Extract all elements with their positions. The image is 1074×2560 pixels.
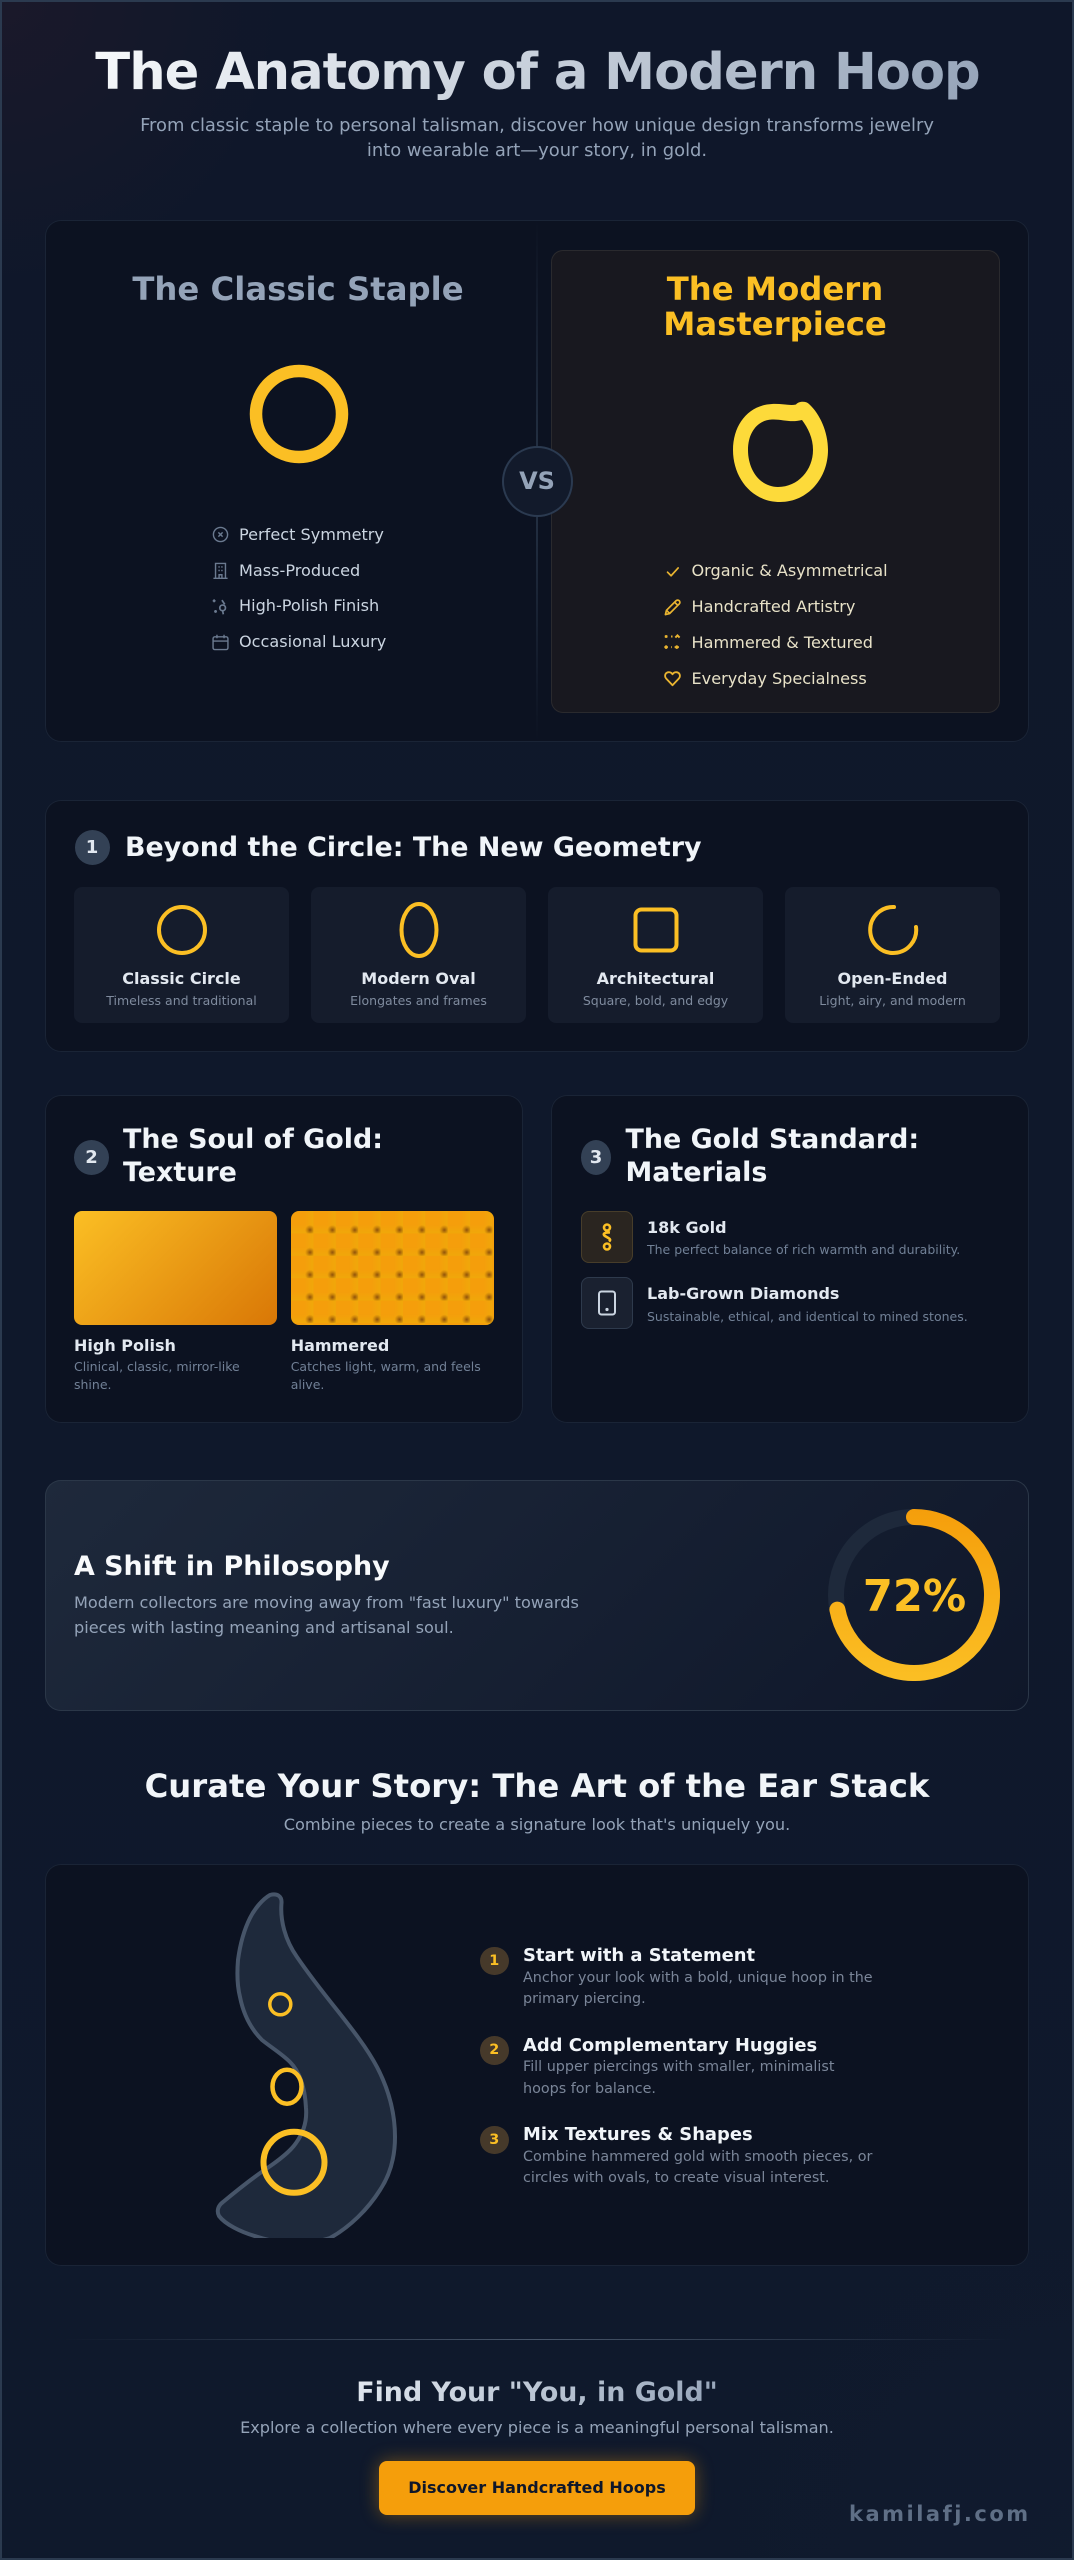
chart: 72 percent gauge: 72% — [862, 1572, 966, 1622]
description: hammered — [291, 1359, 481, 1392]
icon: 18k gold chain — [581, 1211, 633, 1263]
text: lab-grown diamonds: Lab-Grown Diamonds — [647, 1284, 839, 1303]
badge: 2 — [74, 1140, 109, 1174]
step 3 — [480, 2124, 872, 2186]
card: architectural: Square, bold, and edgy — [583, 992, 728, 1008]
subtitle: curate your story: Combine pieces to create a signature look that's uniquely you. — [284, 1814, 790, 1834]
step 2: hoops for balance. — [523, 2081, 656, 2097]
text: philosophy description: pieces with lasting meaning and artisanal soul. — [74, 1618, 454, 1637]
card: architectural — [548, 887, 763, 1023]
panel: philosophy shift — [45, 1480, 1029, 1711]
card: modern oval: Elongates and frames — [350, 992, 487, 1008]
icon: organic hoop — [733, 402, 828, 502]
trait: occasional luxury: Occasional Luxury — [239, 632, 386, 651]
card: modern oval: Modern Oval — [361, 968, 476, 988]
badge: 3 — [581, 1140, 611, 1174]
icon: oval hoop — [400, 902, 438, 958]
illustration: ear with hoops — [216, 1892, 397, 2238]
description: high polish: Clinical, classic, mirror-like — [74, 1359, 240, 1374]
heading: soul of gold: The Soul of Gold: — [123, 1124, 383, 1155]
heading: soul of gold — [123, 1124, 383, 1188]
text: closing line: Explore a collection where every piece is a meaningful personal talisman. — [240, 2418, 834, 2437]
swatch: hammered — [291, 1211, 494, 1325]
card: classic circle — [74, 887, 289, 1023]
hoop: huggie oval — [272, 2070, 302, 2104]
step 1: Anchor your look with a bold, unique hoop in the — [523, 1970, 873, 1986]
heading: classic staple: The Classic Staple — [132, 270, 464, 308]
watermark: kamilafj.com — [849, 2502, 1031, 2526]
heading: beyond the circle: Beyond the Circle: The New Geometry — [125, 832, 702, 863]
step 3: circles with ovals, to create visual interest. — [523, 2170, 829, 2186]
trait: hammered and textured: Hammered & Textured — [692, 633, 873, 652]
text: philosophy description: Modern collectors are moving away from "fast luxury" towards — [74, 1593, 579, 1612]
card: open-ended: Light, airy, and modern — [819, 992, 966, 1008]
card: modern oval — [311, 887, 526, 1023]
icon: circle hoop — [157, 905, 207, 955]
panel: classic staple — [132, 270, 464, 651]
heading: gold standard: Materials — [626, 1157, 767, 1188]
card: classic circle: Classic Circle — [122, 968, 241, 988]
description: high polish — [74, 1359, 240, 1392]
step 2: 2 — [489, 2042, 499, 2058]
swatch: high polish — [74, 1211, 277, 1325]
heading: soul of gold: Texture — [123, 1157, 237, 1188]
list: classic traits — [212, 525, 386, 651]
trait: handcrafted artistry: Handcrafted Artistry — [692, 597, 855, 616]
hoop: statement — [264, 2132, 324, 2193]
heading: curate your story: Curate Your Story: The Art of the Ear Stack — [145, 1767, 929, 1805]
trait: everyday specialness: Everyday Specialness — [692, 669, 867, 688]
panel: ear stack — [45, 1864, 1029, 2266]
heading: find your you in gold: Find Your "You, in Gold" — [356, 2376, 718, 2408]
label: hammered: Hammered — [291, 1336, 389, 1355]
step 3: Mix Textures & Shapes — [523, 2124, 753, 2145]
card: architectural: Architectural — [597, 968, 714, 988]
VS badge — [502, 446, 572, 516]
step 1: primary piercing. — [523, 1991, 646, 2007]
panel: comparison — [45, 220, 1029, 742]
card: classic circle: Timeless and traditional — [106, 992, 257, 1008]
heading: modern masterpiece: Masterpiece — [663, 305, 887, 343]
trait: perfect symmetry: Perfect Symmetry — [239, 525, 384, 544]
icon: lab-grown diamond device — [581, 1277, 633, 1329]
heading: modern masterpiece: The Modern — [667, 270, 883, 308]
text: 18k gold: 18k Gold — [647, 1218, 727, 1237]
button: discover handcrafted hoops: Discover Handcrafted Hoops — [408, 2478, 666, 2497]
subtitle: into wearable art—your story, in gold. — [367, 140, 707, 161]
heading: shift in philosophy: A Shift in Philosophy — [74, 1551, 390, 1582]
step 3: 3 — [489, 2132, 499, 2148]
step 3: Combine hammered gold with smooth pieces, or — [523, 2148, 872, 2164]
icon: open hoop — [868, 905, 918, 955]
icon: classic ring — [250, 364, 348, 464]
heading: gold standard — [626, 1124, 919, 1188]
VS badge: VS — [519, 466, 555, 494]
heading: modern masterpiece — [663, 270, 887, 343]
step 1 — [480, 1945, 873, 2007]
step 1: Start with a Statement — [523, 1945, 755, 1966]
badge: 1: 1 — [86, 836, 98, 858]
trait: high-polish finish: High-Polish Finish — [239, 596, 379, 615]
trait: mass-produced: Mass-Produced — [239, 561, 360, 580]
description: lab-grown diamonds: Sustainable, ethical, and identical to mined stones. — [647, 1309, 968, 1324]
description: hammered: alive. — [291, 1377, 324, 1392]
step 2: Add Complementary Huggies — [523, 2034, 817, 2056]
list: modern traits — [664, 561, 888, 688]
description: high polish: shine. — [74, 1377, 112, 1392]
title: The Anatomy of a Modern Hoop — [95, 42, 980, 102]
step 2 — [480, 2034, 834, 2097]
label: high polish: High Polish — [74, 1336, 176, 1355]
step 1: 1 — [489, 1952, 499, 1968]
chart: 72 percent gauge — [828, 1509, 1000, 1681]
trait: organic and asymmetrical: Organic & Asymmetrical — [692, 561, 888, 580]
card: open-ended — [785, 887, 1000, 1023]
subtitle: From classic staple to personal talisman, discover how unique design transforms jewelry — [140, 115, 934, 136]
card: open-ended: Open-Ended — [837, 968, 948, 988]
subtitle — [140, 115, 934, 161]
step 2: Fill upper piercings with smaller, minimalist — [523, 2059, 834, 2075]
hoop: small stud — [270, 1994, 291, 2015]
heading: gold standard: The Gold Standard: — [626, 1124, 919, 1155]
panel: section 1 new geometry — [45, 800, 1029, 1052]
badge: 1 — [74, 830, 110, 864]
panel: section 2 texture — [45, 1095, 523, 1423]
button: discover handcrafted hoops — [379, 2461, 695, 2515]
panel: section 3 materials — [551, 1095, 1029, 1423]
panel: modern masterpiece — [551, 250, 1000, 713]
badge: 3: 3 — [590, 1146, 602, 1168]
text: philosophy description — [74, 1593, 579, 1637]
badge: 2: 2 — [85, 1146, 98, 1168]
description: hammered: Catches light, warm, and feels — [291, 1359, 481, 1374]
steps list — [480, 1945, 873, 2186]
icon: square hoop — [634, 908, 678, 952]
description: 18k gold: The perfect balance of rich warmth and durability. — [647, 1242, 960, 1257]
